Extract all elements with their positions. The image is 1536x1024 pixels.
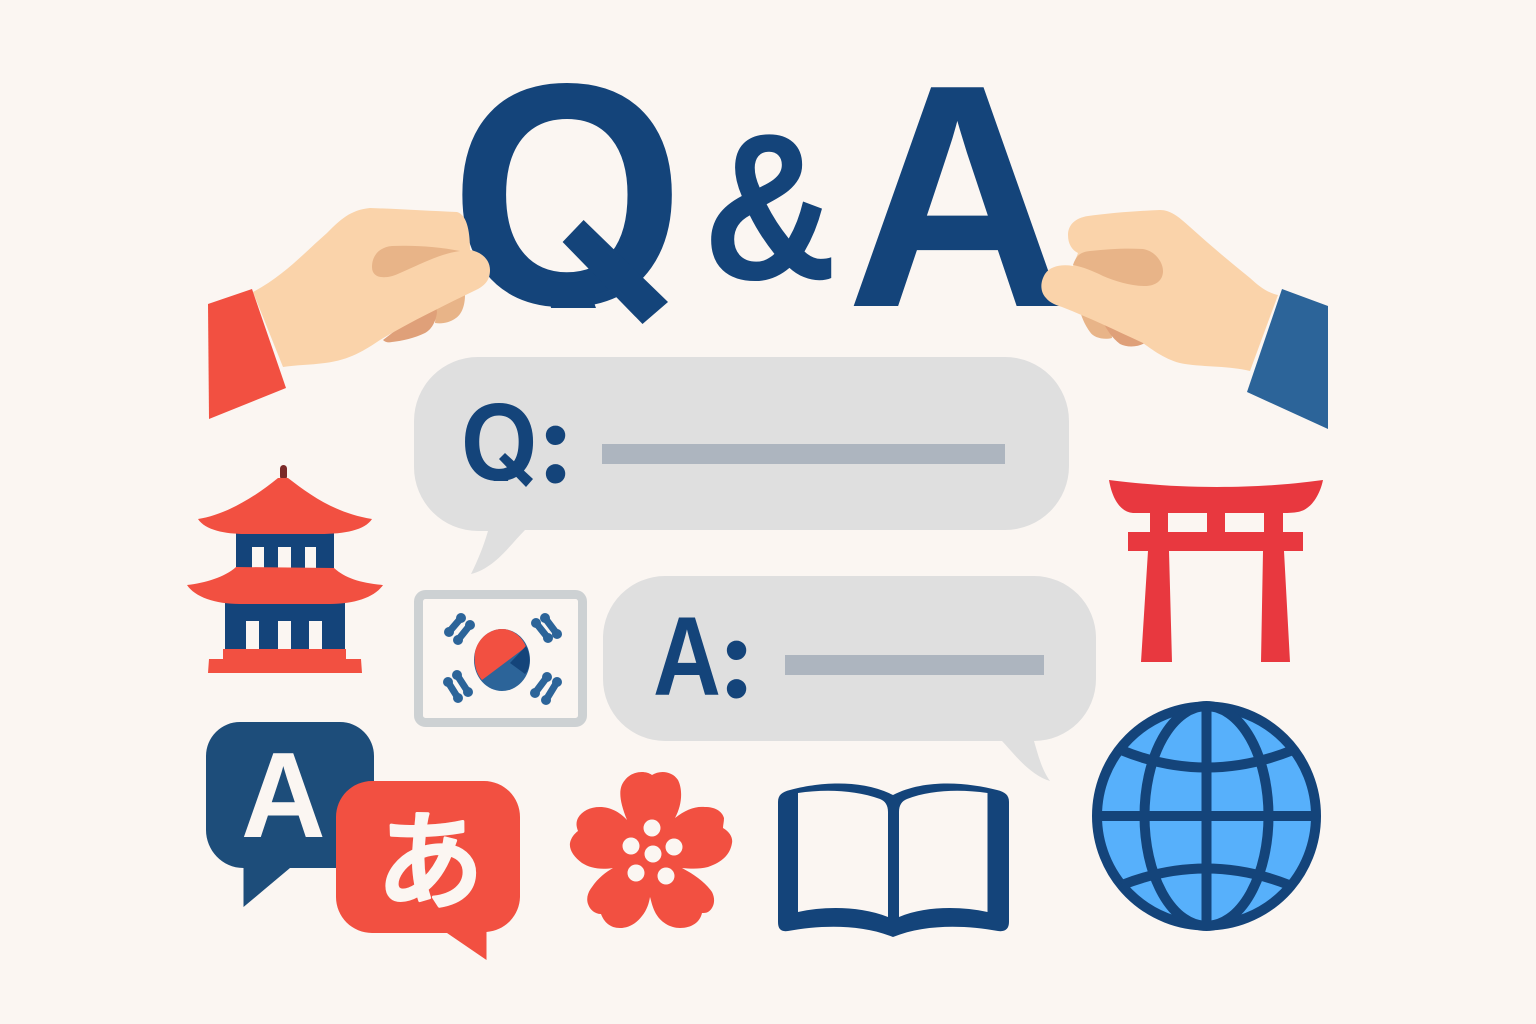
blossom petals — [570, 772, 732, 928]
title letter Q: Q — [450, 18, 684, 373]
answer label — [653, 590, 757, 723]
question bubble body — [414, 357, 1069, 574]
answer bubble body — [603, 576, 1096, 781]
left hand palm — [253, 208, 490, 367]
left hand lower fingers — [383, 295, 465, 342]
title letter A: A — [846, 19, 1069, 374]
right hand holding A — [1041, 210, 1328, 429]
title ampersand: & — [703, 90, 837, 323]
pagoda finial — [280, 465, 287, 480]
answer label colon: : — [717, 590, 757, 723]
question label Q tail — [499, 453, 533, 487]
left thumb shadow — [372, 246, 460, 277]
pagoda lower wall — [225, 602, 345, 652]
icon: Korean pagoda — [187, 465, 383, 673]
icon: globe — [1096, 706, 1317, 926]
English bubble — [206, 722, 374, 907]
title: Q & A — [462, 83, 1059, 324]
answer line placeholder — [785, 655, 1044, 675]
right sleeve cuff — [1247, 289, 1328, 429]
pagoda middle roof — [187, 567, 383, 604]
title Q tail stroke — [563, 220, 668, 324]
globe grid lines — [1096, 706, 1317, 926]
right thumb shadow — [1073, 249, 1163, 286]
icon: open book — [778, 784, 1009, 937]
pagoda upper wall — [236, 532, 334, 570]
pagoda top roof — [198, 478, 372, 534]
blossom stamens — [622, 820, 682, 884]
icon: translation bubbles — [206, 722, 520, 960]
question label colon: : — [536, 375, 576, 508]
question label — [465, 403, 566, 487]
question label letter Q: Q — [461, 382, 537, 504]
right hand palm — [1041, 210, 1278, 371]
question line placeholder — [602, 444, 1005, 464]
globe body — [1097, 706, 1316, 926]
answer label: A — [653, 593, 721, 719]
question speech bubble — [414, 357, 1069, 574]
answer speech bubble — [603, 576, 1096, 781]
right hand lower fingers — [1078, 305, 1145, 347]
left sleeve cuff — [208, 289, 286, 419]
pagoda upper windows — [252, 547, 316, 569]
Japanese bubble — [336, 776, 520, 960]
letter A: A — [241, 728, 326, 864]
icon: cherry blossom — [570, 772, 732, 928]
hiragana a: あ — [376, 776, 484, 932]
pagoda base — [208, 649, 362, 673]
flag trigrams — [443, 613, 562, 705]
icon: Korean flag — [418, 594, 582, 722]
left hand holding Q — [208, 208, 490, 419]
icon: torii gate — [1109, 480, 1323, 662]
flag taegeuk circle — [474, 629, 530, 691]
flag frame — [418, 594, 582, 722]
pagoda lower windows — [246, 621, 322, 650]
